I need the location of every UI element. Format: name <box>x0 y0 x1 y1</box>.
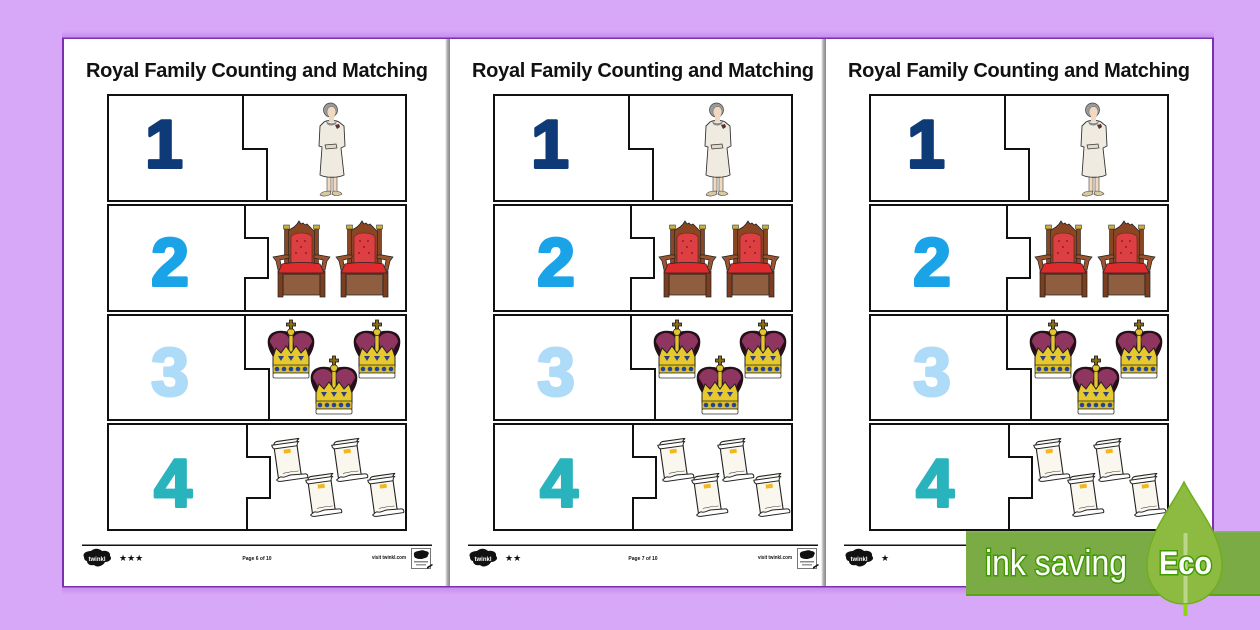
twinkl logo: twinkl <box>850 557 868 563</box>
bottom shade <box>62 587 1214 595</box>
footer <box>82 544 433 569</box>
icon: four scrolls <box>1033 438 1166 517</box>
star rating: ★★★ <box>119 553 143 563</box>
panel: worksheet page 2 <box>450 39 826 586</box>
puzzle row 4 <box>870 424 1168 530</box>
panel: worksheet page 3 <box>826 39 1212 586</box>
puzzle row 4 <box>494 424 792 530</box>
top shade <box>62 30 1214 38</box>
icon: queen <box>1081 103 1107 196</box>
puzzle row 1 <box>494 95 792 201</box>
icon: four scrolls <box>271 438 404 517</box>
footer <box>844 544 974 566</box>
icon: two thrones <box>1035 221 1155 297</box>
twinkl logo <box>84 549 111 566</box>
icon: queen <box>705 103 731 196</box>
twinkl logo: twinkl <box>88 557 106 563</box>
number 4: 4 <box>154 446 192 522</box>
number 2: 2 <box>151 224 189 300</box>
puzzle row 1 <box>870 95 1168 201</box>
number 3: 3 <box>913 334 951 410</box>
puzzle row 1 <box>108 95 406 201</box>
page number: Page 7 of 10 <box>628 556 658 562</box>
icon: three crowns <box>654 320 786 414</box>
twinkl logo: twinkl <box>474 557 492 563</box>
star rating: ★★ <box>505 553 521 563</box>
number 1: 1 <box>145 106 183 182</box>
icon: queen <box>319 103 345 196</box>
puzzle row 3 <box>494 315 792 420</box>
Eco label: Eco <box>1159 545 1212 581</box>
website: visit twinkl.com <box>758 555 793 561</box>
star rating: ★ <box>881 553 889 563</box>
puzzle row 3 <box>108 315 406 420</box>
number 4: 4 <box>916 446 954 522</box>
icon: three crowns <box>268 320 400 414</box>
puzzle row 3 <box>870 315 1168 420</box>
number 2: 2 <box>913 224 951 300</box>
puzzle row 2 <box>870 205 1168 311</box>
heading: Royal Family Counting and Matching <box>472 60 814 82</box>
footer <box>468 544 819 569</box>
number 3: 3 <box>151 334 189 410</box>
quality badge <box>798 548 819 569</box>
icon: four scrolls <box>657 438 790 517</box>
heading: Royal Family Counting and Matching <box>86 60 428 82</box>
website: visit twinkl.com <box>372 555 407 561</box>
quality badge <box>412 548 433 569</box>
puzzle row 4 <box>108 424 406 530</box>
icon: two thrones <box>273 221 393 297</box>
twinkl logo <box>470 549 497 566</box>
heading: Royal Family Counting and Matching <box>848 60 1190 82</box>
puzzle row 2 <box>108 205 406 311</box>
page stack shadow <box>62 38 1214 588</box>
number 3: 3 <box>537 334 575 410</box>
eco ink saving banner <box>966 482 1260 616</box>
puzzle row 2 <box>494 205 792 311</box>
number 4: 4 <box>540 446 578 522</box>
icon: two thrones <box>659 221 779 297</box>
icon: eco leaf drop <box>1147 482 1222 616</box>
panel: worksheet page 1 <box>64 39 450 586</box>
ink saving label: ink saving <box>985 542 1127 583</box>
icon: three crowns <box>1030 320 1162 414</box>
number 1: 1 <box>531 106 569 182</box>
page number: Page 6 of 10 <box>242 556 272 562</box>
number 1: 1 <box>907 106 945 182</box>
number 2: 2 <box>537 224 575 300</box>
